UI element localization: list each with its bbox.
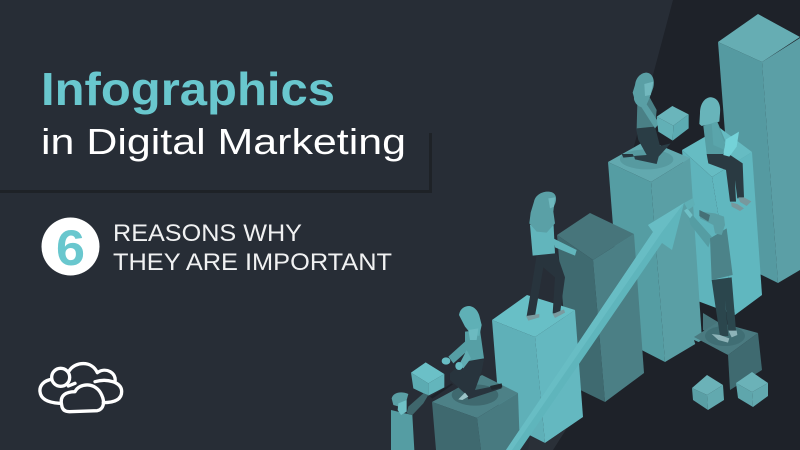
arrow: growth — [506, 203, 684, 450]
bar: kneeling woman's block — [608, 140, 702, 362]
icon: cloud logo — [40, 364, 122, 412]
cube: bottom left — [692, 375, 724, 410]
person: man lifting box — [391, 392, 428, 450]
subtitle: REASONS WHY — [113, 220, 302, 247]
person: woman kneeling on front block — [442, 306, 502, 406]
hand at arrow tip — [684, 198, 695, 210]
subtitle — [113, 220, 392, 276]
badge: number 6 — [42, 218, 100, 276]
bar: front dark block — [432, 375, 520, 450]
badge: number 6: 6 — [56, 220, 85, 276]
bar: tall right — [718, 14, 800, 283]
heading panel corner — [0, 133, 432, 193]
bar: dark middle — [557, 213, 644, 402]
cube: bottom right — [736, 372, 768, 407]
subtitle: THEY ARE IMPORTANT — [113, 249, 392, 276]
person: seated woman with laptop — [699, 97, 751, 211]
person: standing woman — [526, 192, 577, 321]
title: in Digital Marketing — [41, 121, 406, 162]
person: kneeling woman with box — [620, 73, 689, 169]
pedestal: man's block — [694, 313, 762, 390]
cube: being lifted — [411, 362, 453, 399]
person: man touching arrow — [684, 208, 737, 343]
title: Infographics — [41, 63, 335, 115]
bar: light behind seated woman — [682, 128, 762, 315]
illustration: isometric bars and people — [391, 14, 800, 450]
bar: light standing woman's block — [492, 295, 583, 443]
title — [41, 63, 406, 162]
